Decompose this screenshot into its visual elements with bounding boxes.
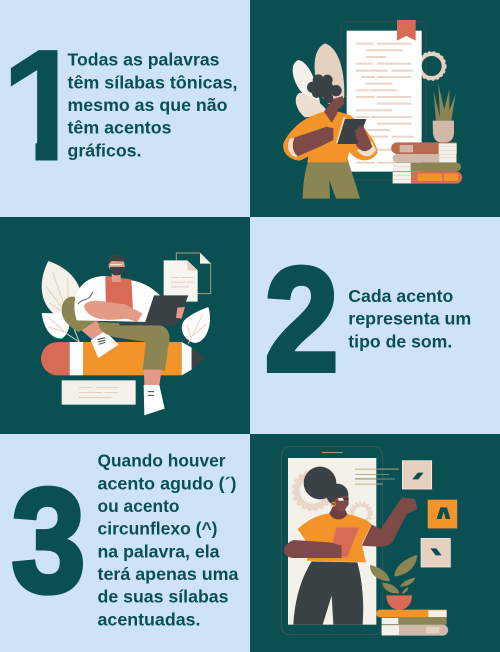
panel: rule 2 text <box>250 217 500 434</box>
accent card grave <box>421 538 451 568</box>
potted plant <box>433 83 456 143</box>
rule 1 text block: têm acentos <box>68 118 172 138</box>
note card <box>62 380 136 405</box>
pencil <box>41 342 205 375</box>
big leaf <box>42 261 82 327</box>
stack of books <box>391 142 462 184</box>
phone screen <box>288 458 376 625</box>
rule 3 text block: acentuadas. <box>98 609 200 629</box>
rule 3 text block: na palavra, ela <box>98 541 220 561</box>
gear <box>418 52 445 80</box>
phone outline <box>281 447 383 635</box>
rule 3 text block: acento agudo (´) <box>98 473 236 493</box>
documents <box>164 253 211 302</box>
rule 2 text block: Cada acento <box>348 286 453 306</box>
rule 3 text block: ou acento <box>98 496 180 516</box>
rule 1 text block: mesmo as que não <box>68 95 228 115</box>
gears <box>293 471 372 524</box>
bookmark <box>397 20 416 41</box>
small leaf left <box>42 313 79 342</box>
rule 2 text block: representa um <box>348 309 471 329</box>
paper page <box>347 31 422 172</box>
rule 1 text block: têm sílabas tônicas, <box>68 72 238 92</box>
rule 3 text block: circunflexo (^) <box>98 519 218 539</box>
rule 3 text block: Quando houver <box>98 451 226 471</box>
woman <box>284 467 417 625</box>
leaves <box>293 43 344 117</box>
panel: rule 3 text <box>0 434 250 652</box>
panel: illustration man on pencil with laptop <box>0 217 250 434</box>
woman <box>283 74 377 199</box>
rule 2 text block: tipo de som. <box>348 331 452 351</box>
panel: rule 1 text <box>10 50 236 160</box>
accent card circumflex <box>428 500 458 529</box>
number 2: 2 <box>264 237 339 402</box>
phone outline <box>341 22 426 180</box>
page text lines <box>356 43 414 164</box>
leaf right <box>182 307 210 344</box>
man <box>62 254 188 415</box>
rule 3 text block <box>98 451 239 629</box>
potted plant <box>370 555 417 610</box>
motion lines <box>355 469 399 485</box>
rule 3 text block: terá apenas uma <box>98 564 239 584</box>
number 3: 3 <box>12 458 86 623</box>
number 1: 1 <box>0 16 89 194</box>
panel: illustration woman with tablet and book <box>250 0 500 217</box>
rule 1 text block: gráficos. <box>68 140 142 160</box>
accent card acute <box>402 461 433 490</box>
rule 1 text block <box>68 50 238 160</box>
rule 3 text block: de suas sílabas <box>98 587 229 607</box>
rule 1 text block: Todas as palavras <box>68 50 220 70</box>
stack of books <box>376 610 448 636</box>
panel: illustration woman in phone with accents <box>250 434 500 652</box>
rule 2 text block <box>348 286 471 351</box>
